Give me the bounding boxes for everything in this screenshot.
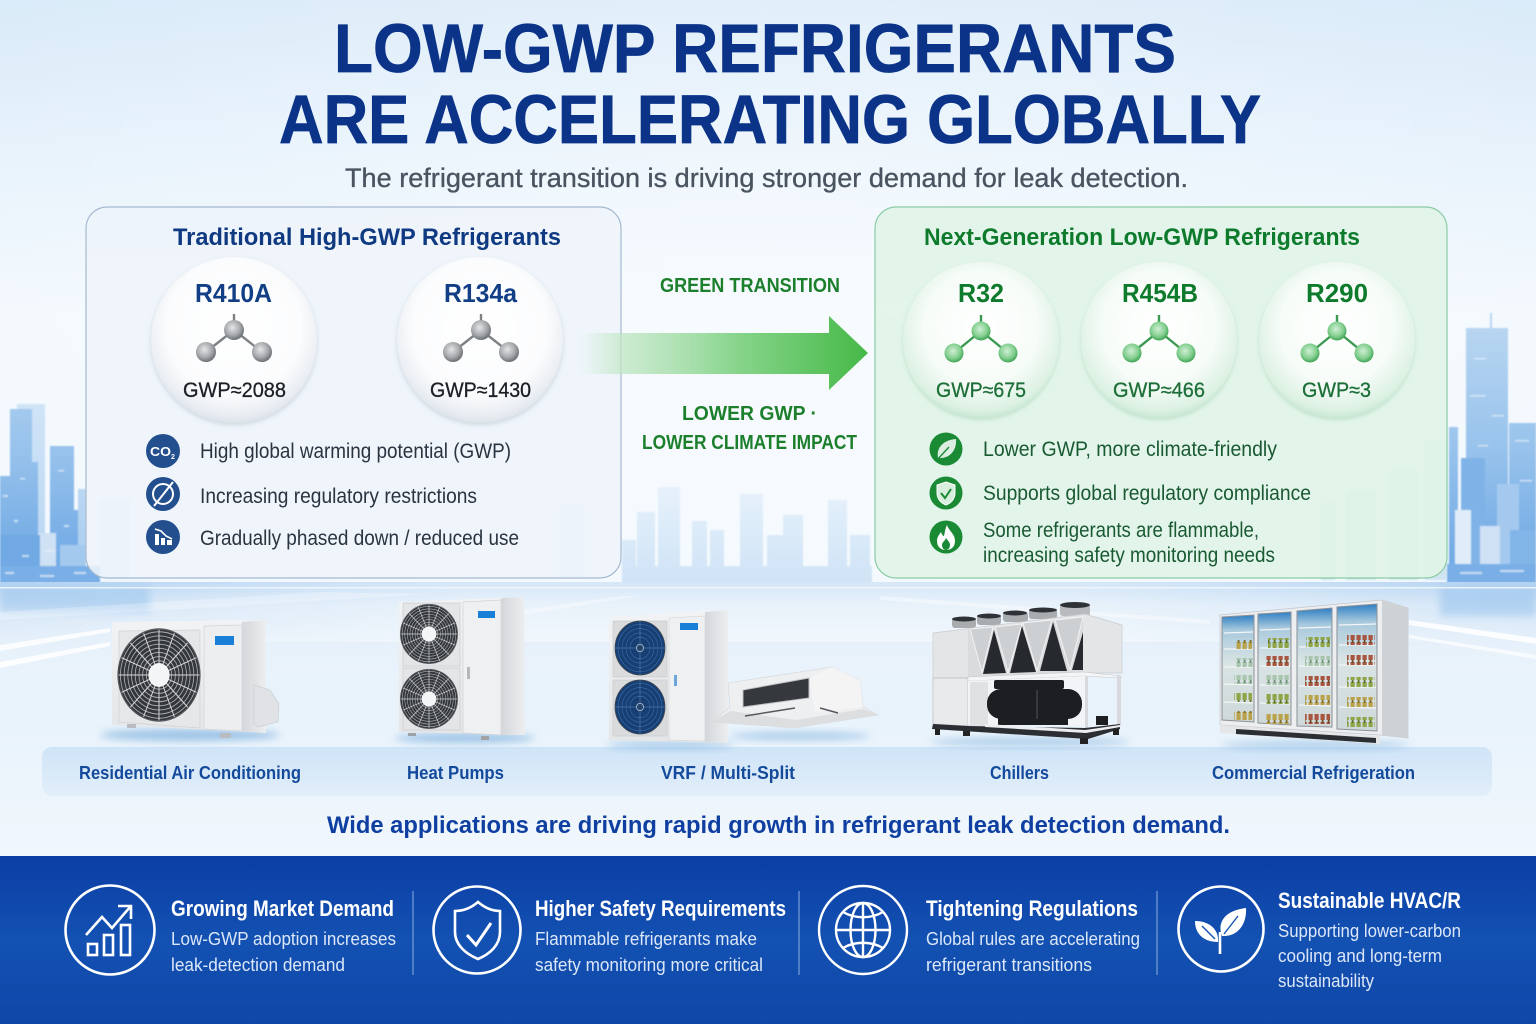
refrigerant: R454B: GWP≈466 [1113, 379, 1205, 402]
refrigerant: R454B [1081, 262, 1237, 418]
refrigerant: R134a [397, 257, 563, 423]
bullet: phased down: Gradually phased down / reduced use [200, 527, 519, 550]
icon: leaf [930, 432, 962, 466]
benefit: sustainable HVAC/R: cooling and long-term [1278, 946, 1442, 966]
appliance: commercial refrigerator [1220, 600, 1410, 749]
benefit: growing market demand: Growing Market Demand [171, 896, 394, 921]
benefit: sustainable HVAC/R: Supporting lower-carbon [1278, 921, 1461, 941]
icon: CO2: 2 [171, 454, 175, 461]
refrigerant: R410A [151, 257, 317, 423]
application labels: Heat Pumps [407, 763, 504, 783]
background skyline left [0, 404, 100, 586]
refrigerant: R32: GWP≈675 [936, 379, 1026, 402]
icon: growth chart [66, 886, 154, 974]
bullet: flammable: increasing safety monitoring needs [983, 544, 1275, 567]
faint skyline inside panels [100, 440, 1447, 580]
refrigerant: R454B: R454B [1122, 278, 1198, 308]
application labels: VRF / Multi-Split [661, 763, 795, 783]
panel: next-generation low-GWP refrigerants [875, 207, 1447, 578]
background skyline center [622, 487, 872, 584]
transition label: GREEN TRANSITION [660, 275, 840, 297]
title: LOW-GWP REFRIGERANTS [334, 10, 1176, 87]
title: ARE ACCELERATING GLOBALLY [279, 81, 1261, 158]
arrow: transition [580, 316, 868, 390]
benefit: tightening regulations [819, 886, 1140, 975]
refrigerant: R134a: GWP≈1430 [430, 379, 531, 402]
lower GWP label: LOWER CLIMATE IMPACT [642, 432, 857, 454]
icon: flame [930, 520, 962, 554]
applications statement: Wide applications are driving rapid growth in refrigerant leak detection demand. [327, 812, 1230, 839]
benefit: tightening regulations: Tightening Regulations [926, 896, 1138, 921]
refrigerant: R290 [1259, 262, 1415, 418]
appliance: chiller [930, 602, 1130, 746]
benefit: higher safety requirements: Higher Safety Requirements [535, 896, 786, 921]
background skyline right [1447, 313, 1536, 586]
benefit: growing market demand [66, 886, 396, 975]
refrigerant: R32: R32 [958, 278, 1004, 308]
panel heading: Traditional High-GWP Refrigerants [173, 224, 561, 251]
appliance: residential air conditioner [100, 620, 280, 741]
appliance: VRF outdoor unit [606, 610, 734, 749]
bullet: high GWP: High global warming potential (GWP) [200, 440, 511, 463]
icon: prohibited [146, 477, 180, 511]
application labels [79, 763, 1415, 783]
bullet: regulatory restrictions: Increasing regulatory restrictions [200, 485, 477, 508]
benefit: higher safety requirements: Flammable refrigerants make [535, 929, 757, 949]
application label band [42, 747, 1492, 796]
icon: shield [434, 886, 520, 974]
title [279, 10, 1261, 158]
refrigerant: R290: GWP≈3 [1302, 379, 1371, 402]
footer band [0, 856, 1536, 1024]
refrigerant: R32 [903, 262, 1059, 418]
benefit: sustainable HVAC/R [1178, 886, 1461, 991]
bullet: regulatory compliance: Supports global regulatory compliance [983, 482, 1311, 505]
icon: sprout [1178, 886, 1264, 972]
icon: CO2: CO [150, 444, 171, 459]
panel heading: Next-Generation Low-GWP Refrigerants [924, 224, 1360, 251]
subtitle: The refrigerant transition is driving stronger demand for leak detection. [345, 163, 1188, 193]
bullet: flammable [983, 519, 1275, 567]
benefit: tightening regulations: Global rules are accelerating [926, 929, 1140, 949]
water reflection [0, 582, 1536, 690]
benefit: growing market demand: leak-detection demand [171, 955, 345, 975]
benefit: higher safety requirements [434, 886, 786, 975]
icon: globe [819, 886, 907, 974]
refrigerant: R410A: R410A [195, 278, 272, 308]
benefit: sustainable HVAC/R: sustainability [1278, 971, 1374, 991]
benefit: higher safety requirements: safety monitoring more critical [535, 955, 763, 975]
lower GWP label: LOWER GWP · [682, 403, 817, 425]
lower GWP label [642, 403, 857, 454]
application labels: Chillers [990, 763, 1049, 783]
panel: traditional high-GWP refrigerants [86, 207, 621, 578]
refrigerant: R410A: GWP≈2088 [183, 379, 286, 402]
bullet: climate-friendly: Lower GWP, more climate-friendly [983, 438, 1277, 461]
application labels: Commercial Refrigeration [1212, 763, 1415, 783]
icon: declining bars [146, 520, 180, 554]
appliance: VRF ceiling cassette [713, 667, 878, 740]
icon: shield check [930, 476, 962, 510]
refrigerant: R290: R290 [1306, 278, 1368, 308]
bullet: flammable: Some refrigerants are flammable, [983, 519, 1259, 542]
icon: CO2 [146, 434, 180, 468]
benefit: growing market demand: Low-GWP adoption increases [171, 929, 396, 949]
appliance: heat pump [395, 597, 535, 743]
benefit: sustainable HVAC/R: Sustainable HVAC/R [1278, 888, 1461, 913]
benefit: tightening regulations: refrigerant transitions [926, 955, 1092, 975]
application labels: Residential Air Conditioning [79, 763, 301, 783]
refrigerant: R134a: R134a [444, 278, 518, 308]
